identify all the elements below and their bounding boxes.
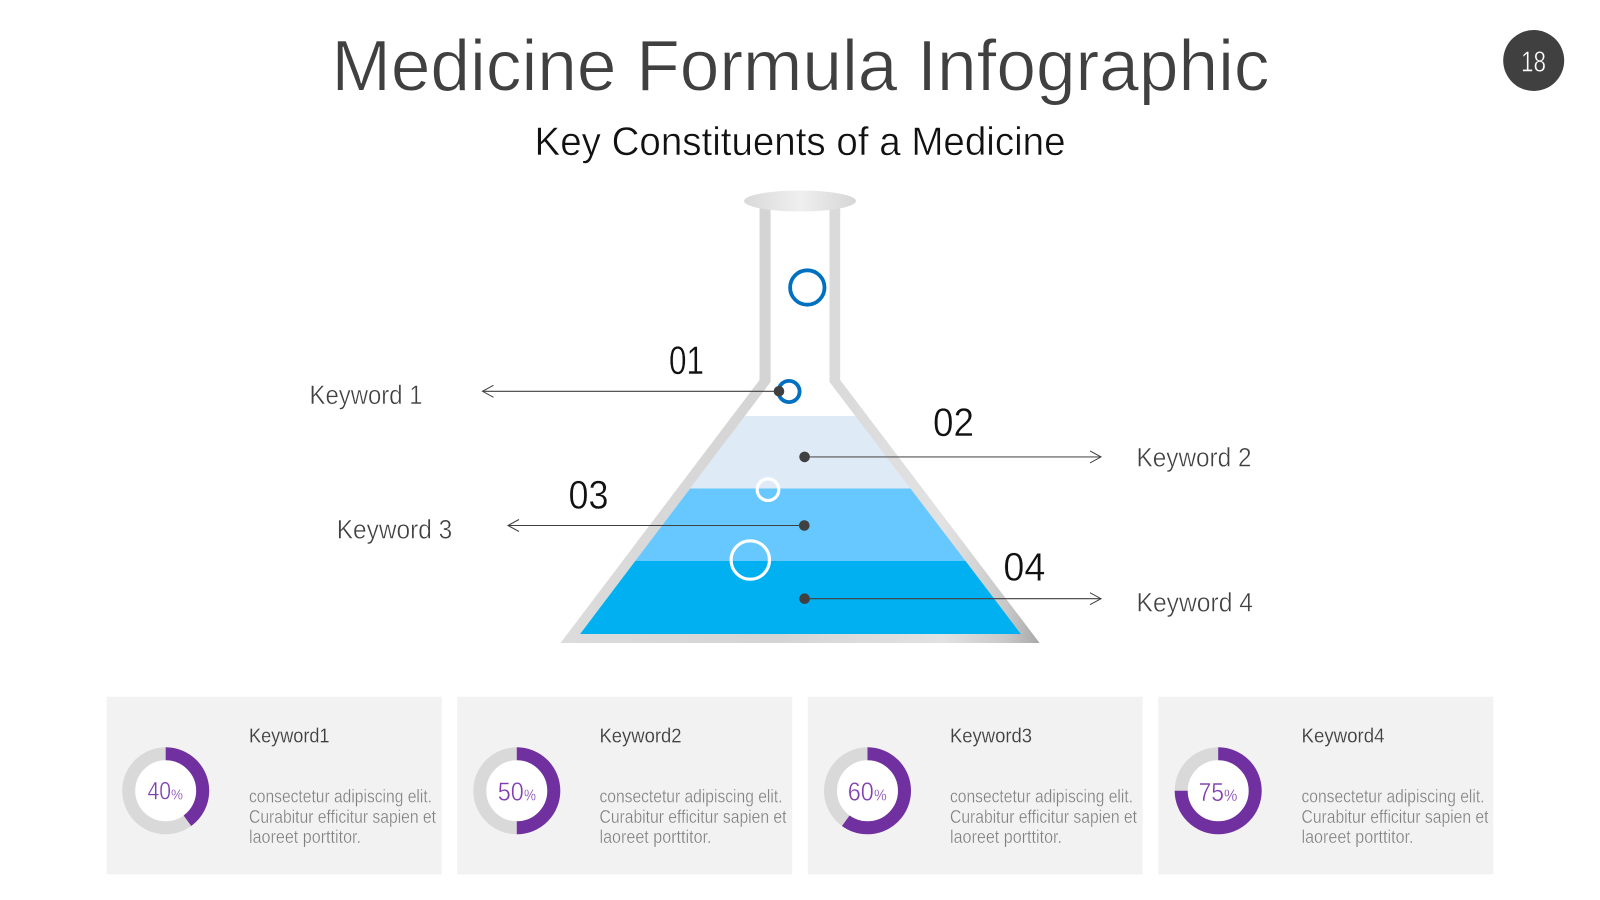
description — [950, 787, 1137, 847]
panel: keyword 1 — [107, 697, 442, 874]
panel: keyword 3 — [808, 697, 1143, 874]
liquid layer: medium — [635, 488, 966, 561]
title: Medicine Formula Infographic — [332, 26, 1270, 106]
bubble: large white — [731, 541, 770, 579]
donut: 40%: % — [171, 786, 183, 804]
description: Curabitur efficitur sapien et — [600, 807, 786, 827]
liquid layer: light — [690, 416, 911, 488]
page number badge: 18 — [1521, 47, 1546, 79]
keyword heading: Keyword3 — [950, 726, 1032, 748]
keyword heading: Keyword2 — [600, 726, 682, 748]
bubble: large blue — [790, 270, 824, 305]
bubble: small white — [757, 479, 779, 501]
donut: 75%: 75 — [1198, 777, 1224, 807]
callout 04 — [799, 546, 1253, 618]
callout 03: 03 — [568, 474, 608, 518]
donut: 60%: % — [874, 788, 887, 804]
keyword heading: Keyword4 — [1302, 726, 1384, 748]
callout 02: Keyword 2 — [1136, 443, 1252, 473]
description: consectetur adipiscing elit. — [1302, 787, 1484, 807]
callout 03 — [337, 474, 810, 544]
flask glass — [560, 204, 1040, 643]
donut: 40%: 40 — [148, 778, 171, 806]
donut: 50%: % — [524, 788, 536, 804]
flask diagram — [560, 190, 1040, 643]
panel: keyword 4 — [1158, 697, 1493, 874]
description: Curabitur efficitur sapien et — [1302, 807, 1488, 827]
description: consectetur adipiscing elit. — [600, 787, 782, 807]
donut: 75%: % — [1224, 786, 1237, 805]
donut: 50%: 50 — [498, 776, 524, 806]
callout 01: Keyword 1 — [310, 380, 422, 410]
keyword heading: Keyword1 — [249, 726, 330, 748]
panel: keyword 2 — [457, 697, 792, 874]
bubble: small blue — [778, 381, 800, 402]
description: consectetur adipiscing elit. — [249, 787, 432, 807]
description: laoreet porttitor. — [249, 827, 361, 847]
description: laoreet porttitor. — [950, 827, 1062, 847]
description — [1302, 787, 1488, 847]
callout 04: 04 — [1003, 546, 1045, 590]
subtitle: Key Constituents of a Medicine — [534, 120, 1066, 164]
donut: 60% — [830, 754, 904, 828]
donut: 40% — [129, 754, 203, 828]
description: Curabitur efficitur sapien et — [950, 807, 1137, 827]
liquid layer: deep — [580, 561, 1021, 634]
callout 01 — [310, 339, 784, 410]
callout 04: Keyword 4 — [1136, 588, 1253, 618]
description: laoreet porttitor. — [1302, 827, 1414, 847]
donut: 75% — [1181, 754, 1255, 828]
description: consectetur adipiscing elit. — [950, 787, 1133, 807]
callout 03: Keyword 3 — [337, 514, 452, 544]
description: laoreet porttitor. — [600, 827, 712, 847]
donut: 60%: 60 — [848, 776, 874, 806]
callout 02: 02 — [933, 401, 974, 445]
description: Curabitur efficitur sapien et — [249, 807, 436, 827]
callout 02 — [799, 401, 1252, 473]
callout 01: 01 — [669, 339, 704, 383]
description — [249, 787, 436, 847]
page number badge — [1503, 30, 1564, 91]
flask rim — [744, 190, 856, 212]
donut: 50% — [480, 754, 554, 828]
description — [600, 787, 786, 847]
